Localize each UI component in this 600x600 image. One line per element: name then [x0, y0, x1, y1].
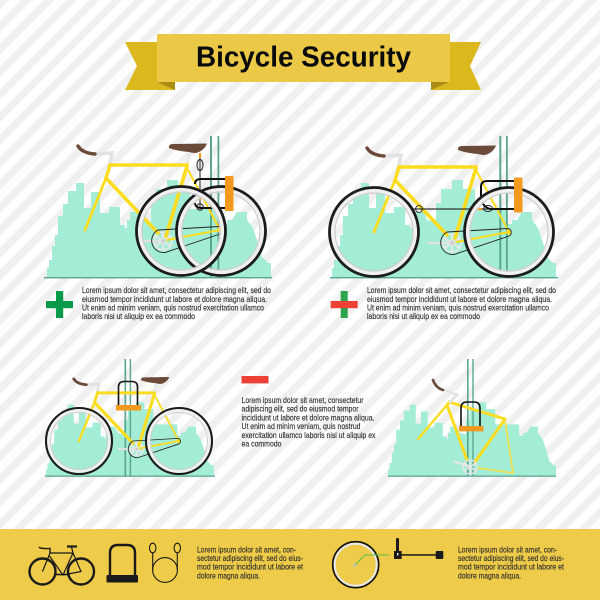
- tilted frame: [418, 380, 513, 473]
- rear wheel: [146, 408, 212, 474]
- ground line: [45, 476, 215, 477]
- text block 1: Ut enim ad minim veniam, quis nostrud exercitation ullamco: [82, 304, 264, 312]
- footer text left: dolore magna aliqua.: [197, 571, 260, 580]
- text block 2: eiusmod tempor incididunt ut labore et dolore magna aliqua.: [367, 295, 552, 304]
- u-lock: [116, 382, 141, 410]
- skyline: [388, 402, 556, 476]
- footer text right: mod tempor incididunt ut labore et: [458, 563, 565, 572]
- text block 3: Ut enim ad minim veniam, quis nostrud: [242, 422, 361, 431]
- bike frame: [78, 144, 223, 253]
- icon: u-lock: [106, 545, 138, 582]
- panel: good lock, rear wheel and frame: [330, 136, 558, 278]
- icon: cable: [150, 543, 180, 582]
- text block 1: [82, 286, 271, 321]
- front wheel: [46, 408, 112, 474]
- pole: [124, 359, 131, 476]
- text block 3: incididunt ut labore et dolore magna aliqua.: [242, 413, 374, 422]
- footer text right: Lorem ipsum dolor sit amet, con-: [458, 545, 557, 554]
- text block 3: [242, 396, 376, 448]
- pole: [467, 359, 474, 476]
- cable: [405, 181, 514, 212]
- title banner: [125, 34, 481, 90]
- skyline: [332, 180, 556, 277]
- icon: minus: [242, 376, 268, 383]
- lock body: [225, 176, 234, 211]
- text block 3: adipiscing elit, sed do eiusmod tempor: [242, 405, 359, 414]
- title: Bicycle Security: [196, 42, 411, 74]
- footer text left: sectetur adipiscing elit, sed do eius-: [197, 554, 303, 563]
- text block 2: Ut enim ad minim veniam, quis nostrud exercitation ullamco: [367, 304, 549, 312]
- icon: bicycle: [30, 546, 94, 584]
- pole: [210, 136, 219, 277]
- bike frame: [74, 377, 181, 458]
- icon: plus: [46, 291, 73, 318]
- rear wheel: [176, 186, 266, 276]
- lock body: [514, 178, 522, 212]
- text block 2: laboris nisi ut aliquip ex ea commodo: [367, 312, 480, 321]
- text block 3: exercitation ullamco laboris nisi ut aliquip ex: [242, 431, 376, 440]
- text block 2: [367, 286, 556, 321]
- panel: stolen wheels, frame tilted: [388, 359, 556, 477]
- footer band: [0, 529, 600, 600]
- footer text left: mod tempor incididunt ut labore et: [197, 563, 304, 572]
- text block 3: ea commodo: [242, 440, 282, 448]
- rear wheel: [464, 188, 554, 276]
- front wheel folded: [136, 186, 226, 276]
- text block 1: eiusmod tempor incididunt ut labore et dolore magna aliqua.: [82, 295, 267, 304]
- skyline: [46, 402, 214, 476]
- ground line: [388, 476, 556, 477]
- icon: wheel: [333, 542, 389, 588]
- footer text left: Lorem ipsum dolor sit amet, con-: [197, 545, 296, 554]
- icon: wheel lock: [394, 538, 443, 559]
- front wheel: [330, 188, 418, 276]
- footer text right: dolore magna aliqua.: [458, 571, 521, 580]
- panel: good lock, both wheels: [44, 136, 272, 278]
- text block 1: laboris nisi ut aliquip ex ea commodo: [82, 312, 195, 321]
- u-lock: [459, 402, 484, 431]
- ground line: [330, 277, 558, 278]
- pole: [499, 136, 508, 277]
- icon: plus and minus: [331, 291, 358, 318]
- wheel lock and cable: [195, 153, 225, 210]
- footer text right: sectetur adipiscing elit, sed do eius-: [458, 554, 564, 563]
- panel: bad lock, frame only: [45, 359, 215, 477]
- skyline: [47, 180, 271, 277]
- text block 1: Lorem ipsum dolor sit amet, consectetur adipiscing elit, sed do: [82, 286, 271, 295]
- footer text left: [197, 545, 304, 580]
- text block 3: Lorem ipsum dolor sit amet, consectetur: [242, 396, 364, 405]
- ground line: [44, 277, 272, 278]
- bike frame: [367, 146, 512, 255]
- crank and chainring: [453, 460, 477, 474]
- footer text right: [458, 545, 565, 580]
- text block 2: Lorem ipsum dolor sit amet, consectetur adipiscing elit, sed do: [367, 286, 556, 295]
